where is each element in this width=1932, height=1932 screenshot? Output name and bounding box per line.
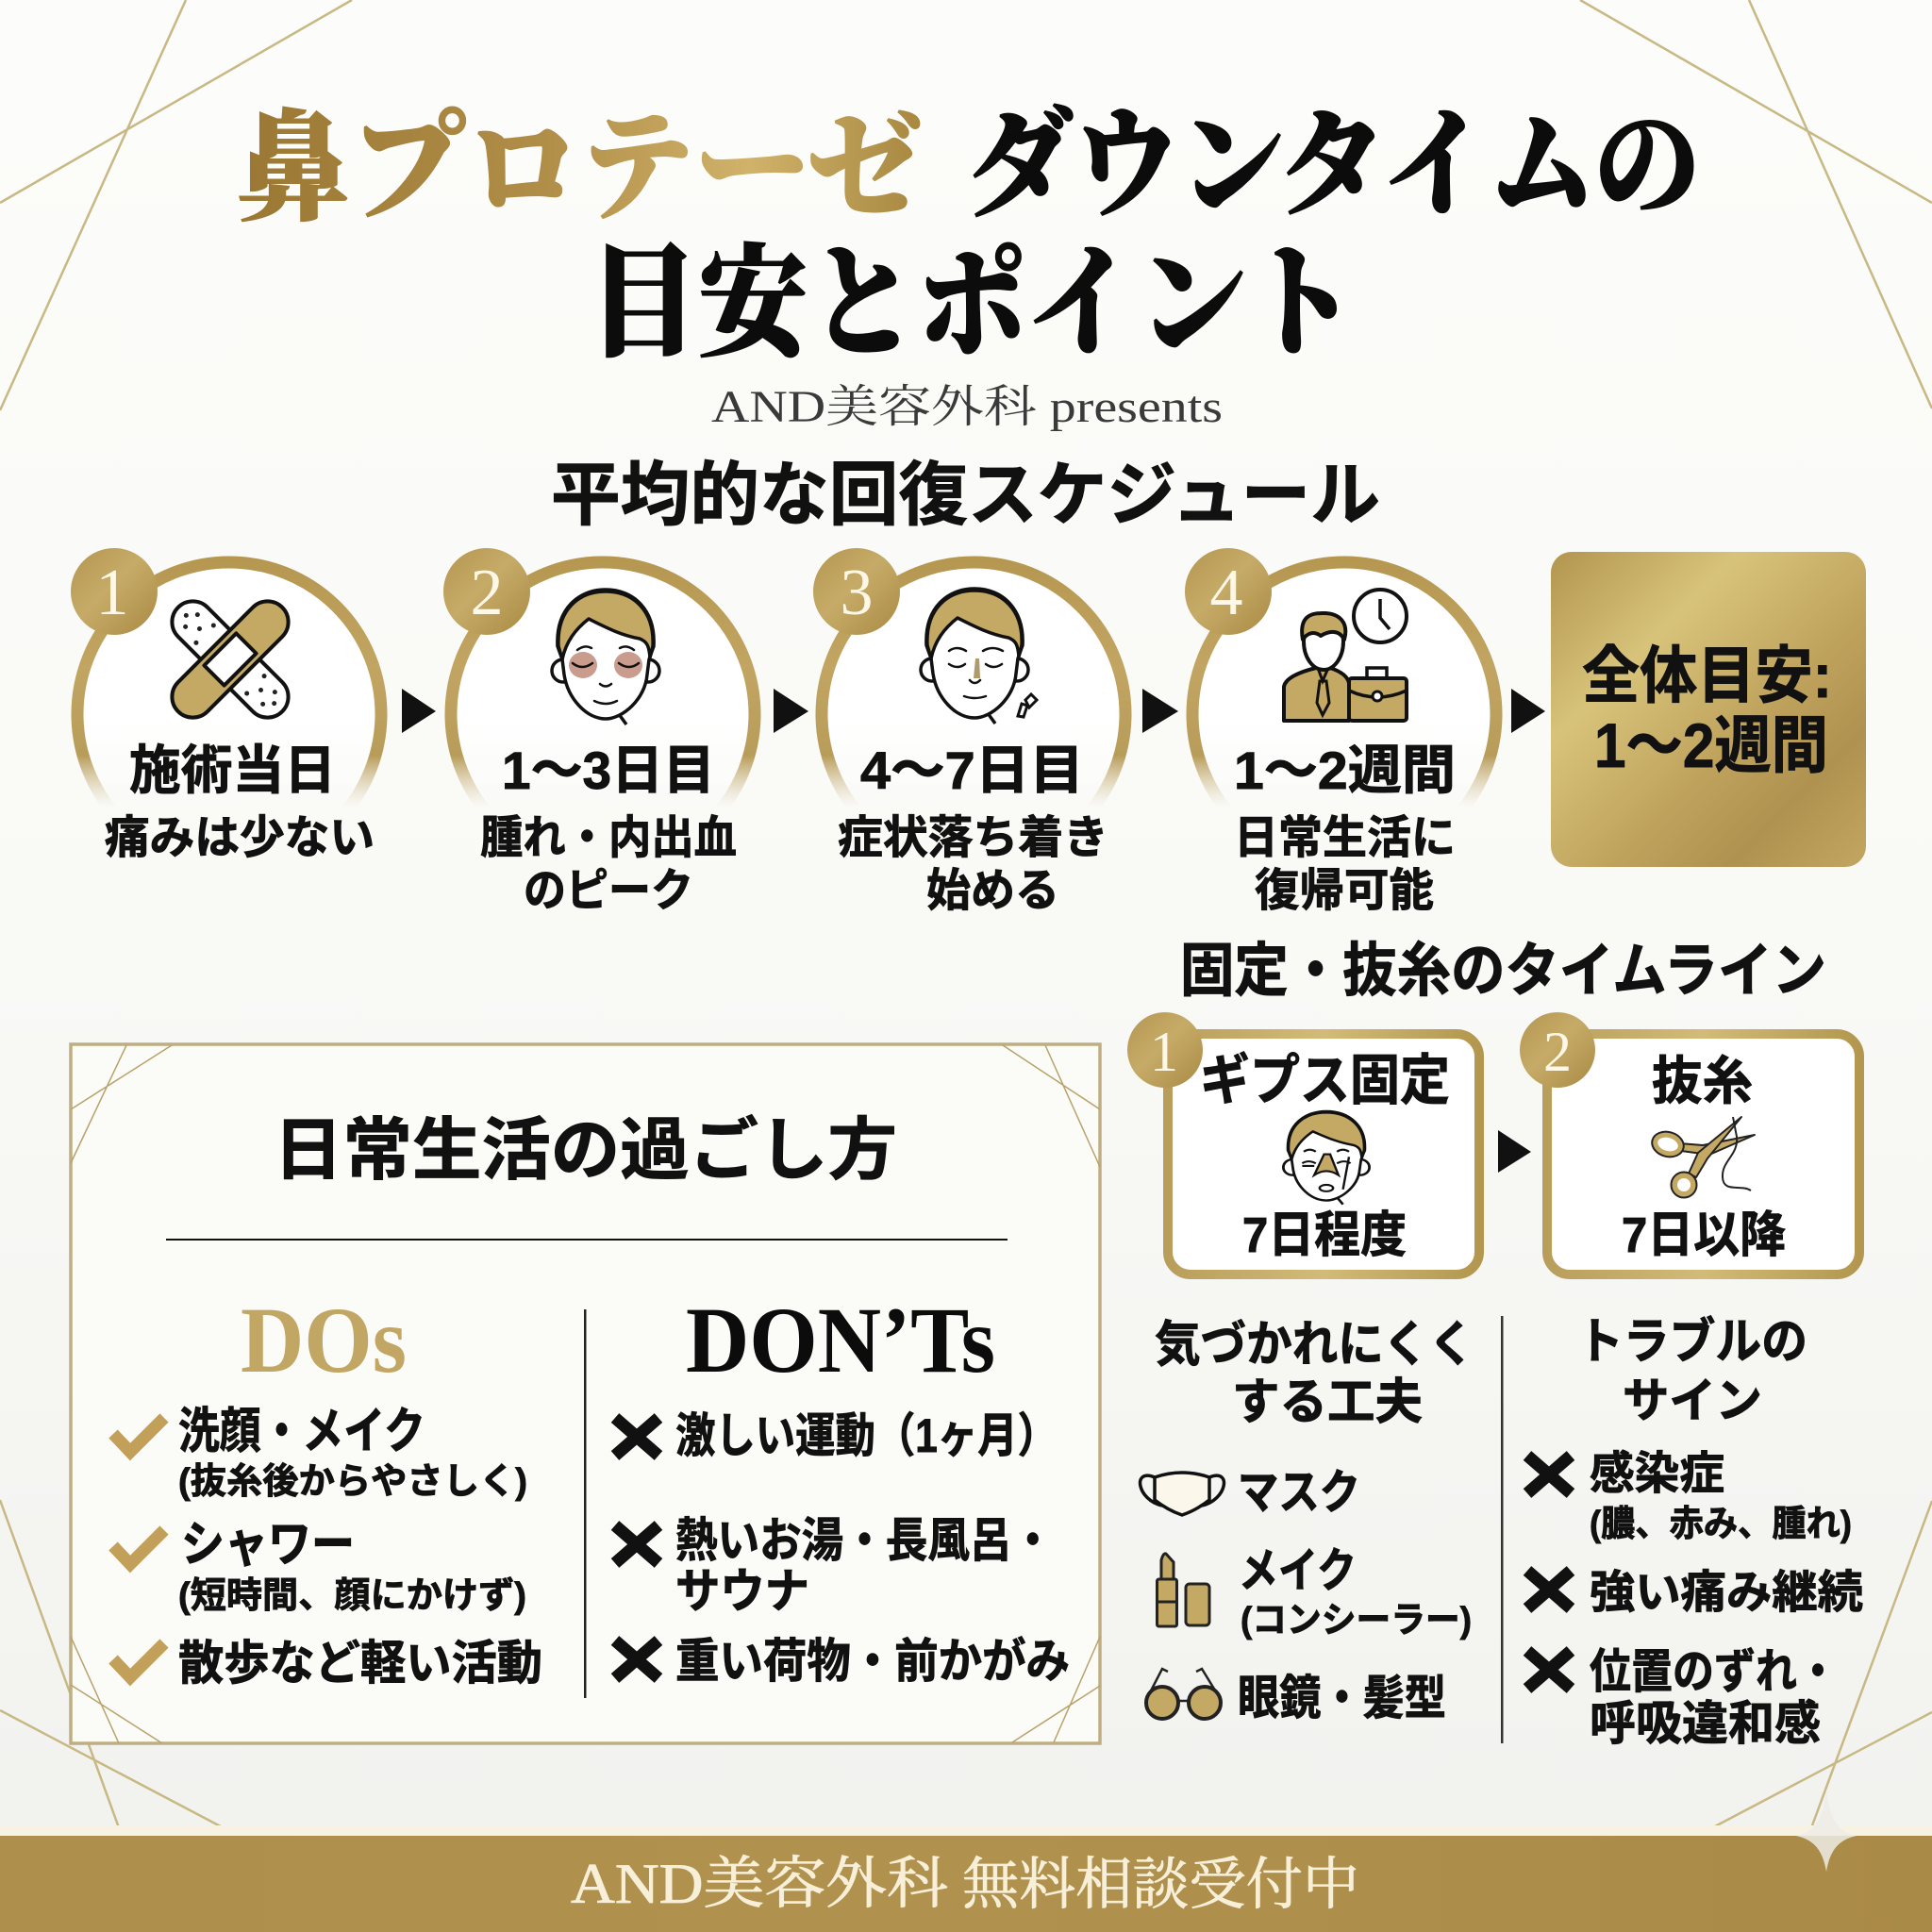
tip: glasses and hairstyle: 眼鏡・髪型	[1238, 1672, 1446, 1724]
item: hot bath and sauna: 熱いお湯・長風呂・	[675, 1514, 1054, 1567]
card 2: suture removal	[1520, 1012, 1859, 1274]
note: peak swelling: のピーク	[524, 866, 693, 916]
sign: shift and breathing	[1527, 1645, 1839, 1750]
arrow: card 1 to card 2	[1498, 1130, 1531, 1173]
title: ダウンタイムの	[967, 102, 1700, 231]
sign: infection: 感染症	[1590, 1449, 1724, 1499]
sign: shift and breathing: 呼吸違和感	[1590, 1697, 1821, 1750]
note: back to daily life: 日常生活に	[1234, 813, 1456, 863]
DON'Ts column	[615, 1288, 1070, 1688]
tip: mask	[1141, 1466, 1360, 1519]
card 1: cast: ギプス固定	[1200, 1050, 1450, 1111]
item: light activity: 散歩など軽い活動	[178, 1637, 542, 1690]
step 3: days 4-7	[813, 548, 1125, 916]
footer bar	[0, 1825, 1932, 1932]
arrow 2	[774, 689, 808, 733]
item: face wash and makeup: 洗顔・メイク	[178, 1405, 425, 1459]
tip: makeup: (コンシーラー)	[1241, 1601, 1472, 1641]
item: shower	[113, 1518, 526, 1616]
DON'Ts column: DON’Ts	[686, 1288, 995, 1392]
title: 鼻プロテーゼ	[236, 105, 922, 236]
icon: scissors and thread	[1649, 1117, 1755, 1198]
title: 目安とポイント	[589, 238, 1356, 372]
footer bar: AND美容外科	[571, 1853, 948, 1915]
step 3: days 4-7: 3	[840, 557, 874, 629]
tip: makeup	[1157, 1544, 1472, 1641]
step 4: weeks 1-2: 4	[1209, 557, 1243, 629]
label: days 1-3: 1〜3日目	[502, 741, 715, 800]
step 4: weeks 1-2	[1185, 548, 1496, 916]
card 2: suture removal: 2	[1543, 1021, 1572, 1083]
section: trouble signs: サイン	[1623, 1374, 1762, 1427]
icon: bandage	[163, 592, 297, 726]
card 1: cast: 1	[1150, 1021, 1178, 1083]
step 2: days 1-3	[443, 548, 755, 916]
note: symptoms settle	[838, 813, 1108, 916]
heading: fixation and suture removal timeline: 固定・抜糸のタイムライン	[1180, 939, 1826, 1004]
item: shower: (短時間、顔にかけず)	[178, 1576, 526, 1616]
card 2: suture removal: 抜糸	[1652, 1052, 1753, 1110]
footer bar: 無料相談受付中	[962, 1854, 1359, 1916]
note: peak swelling	[480, 813, 737, 916]
section: hiding tips: する工夫	[1232, 1375, 1423, 1430]
title	[236, 102, 1700, 372]
sign: infection	[1527, 1449, 1852, 1544]
item: hot bath and sauna	[615, 1514, 1054, 1618]
icon: business person and clock	[1284, 590, 1407, 721]
note: back to daily life	[1234, 813, 1456, 916]
icon: swollen face	[552, 590, 659, 724]
step 1: day of treatment	[71, 548, 381, 866]
step 1: day of treatment: 1	[96, 557, 128, 629]
icon: face with nose cast	[1283, 1111, 1370, 1205]
presenter line: AND美容外科 presents	[711, 382, 1223, 432]
sign: persistent pain: 強い痛み継続	[1590, 1568, 1863, 1618]
note: symptoms settle: 始める	[926, 866, 1059, 916]
panel: daily life	[71, 1044, 1100, 1743]
tip: glasses and hairstyle	[1146, 1669, 1446, 1724]
item: face wash and makeup: (抜糸後からやさしく)	[178, 1462, 527, 1502]
card 1: cast	[1127, 1012, 1479, 1274]
DOs column	[113, 1288, 542, 1690]
item: intense exercise: 激しい運動（1ヶ月）	[675, 1409, 1058, 1462]
note: back to daily life: 復帰可能	[1255, 866, 1434, 916]
sign: infection: (膿、赤み、腫れ)	[1590, 1505, 1852, 1544]
label: weeks 1-2: 1〜2週間	[1234, 741, 1456, 800]
item: face wash and makeup	[113, 1405, 527, 1502]
section: trouble signs	[1527, 1315, 1863, 1750]
note: little pain: 痛みは少ない	[105, 813, 375, 863]
DOs column: DOs	[241, 1288, 407, 1392]
arrow 3	[1142, 689, 1178, 733]
overall estimate box: 全体目安:	[1582, 641, 1832, 710]
sparkle	[1796, 1790, 1857, 1872]
arrow 1	[402, 689, 436, 733]
tip: makeup: メイク	[1239, 1544, 1357, 1597]
panel heading: 日常生活の過ごし方	[274, 1113, 897, 1189]
item: heavy lifting: 重い荷物・前かがみ	[675, 1635, 1070, 1688]
label: days 4-7: 4〜7日目	[860, 741, 1084, 800]
card 1: cast: 7日程度	[1242, 1208, 1407, 1263]
step 2: days 1-3: 2	[470, 557, 504, 629]
item: hot bath and sauna: サウナ	[675, 1565, 809, 1618]
item: shower: シャワー	[181, 1518, 355, 1573]
icon: calm face	[921, 589, 1037, 724]
section: trouble signs: トラブルの	[1577, 1315, 1807, 1370]
section: hiding tips	[1141, 1318, 1474, 1724]
column divider	[1501, 1316, 1504, 1743]
heading: recovery schedule: 平均的な回復スケジュール	[551, 456, 1380, 534]
tip: mask: マスク	[1238, 1466, 1360, 1519]
sign: shift and breathing: 位置のずれ・	[1590, 1645, 1839, 1698]
card 2: suture removal: 7日以降	[1622, 1208, 1786, 1263]
arrow 4	[1511, 689, 1545, 733]
overall estimate box	[1551, 552, 1866, 867]
overall estimate box: 1〜2週間	[1594, 710, 1828, 780]
section: hiding tips: 気づかれにくく	[1155, 1318, 1474, 1373]
note: symptoms settle: 症状落ち着き	[838, 813, 1108, 863]
label: day of treatment: 施術当日	[129, 741, 336, 800]
note: peak swelling: 腫れ・内出血	[480, 813, 737, 863]
